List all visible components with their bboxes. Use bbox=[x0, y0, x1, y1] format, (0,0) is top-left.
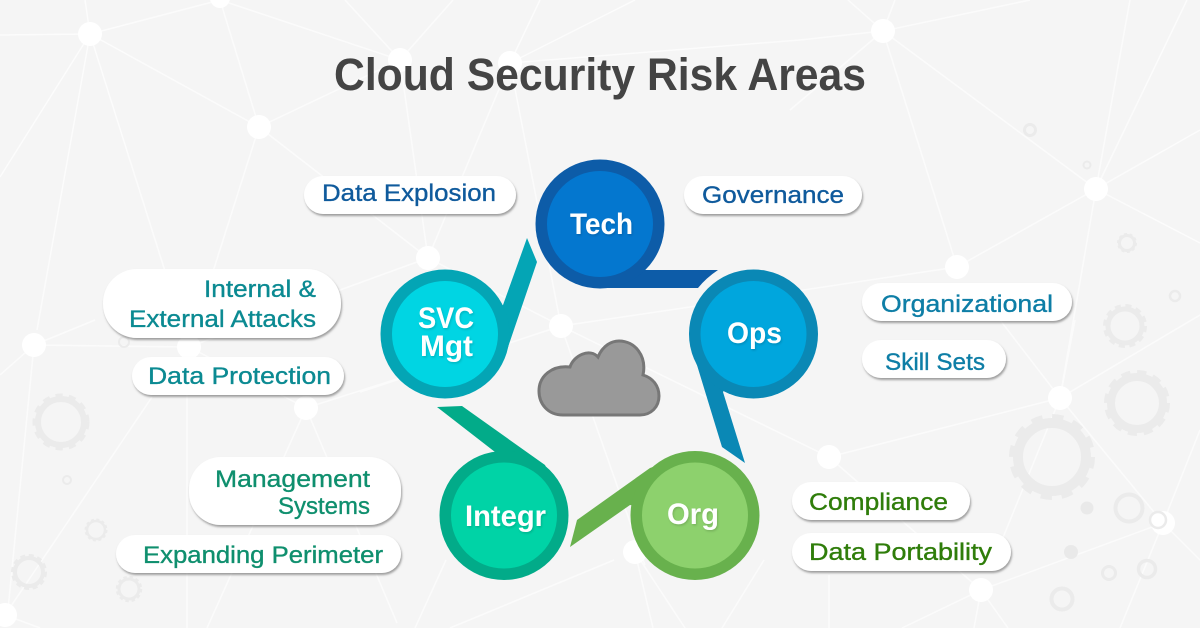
label: Governance: Governance bbox=[702, 182, 844, 209]
label: Organizational bbox=[862, 283, 1072, 321]
label: Data Portability: Data Portability bbox=[809, 539, 992, 566]
icon: cloud bbox=[539, 341, 659, 415]
node: Integr bbox=[437, 406, 568, 580]
label: Data Explosion bbox=[304, 176, 516, 214]
label: Compliance bbox=[792, 482, 970, 520]
label: Data Protection bbox=[132, 357, 344, 395]
node: Ops bbox=[689, 270, 818, 463]
label: Data Explosion: Data Explosion bbox=[322, 180, 496, 207]
label: Internal & External Attacks: External Attacks bbox=[129, 306, 316, 333]
cycle diagram bbox=[380, 160, 818, 580]
label: Compliance: Compliance bbox=[809, 489, 948, 516]
node: Integr: Integr bbox=[465, 500, 546, 533]
label: Internal & External Attacks: Internal & bbox=[204, 276, 316, 303]
decorative gears and rings bbox=[12, 124, 1180, 610]
node: SVC Mgt: Mgt bbox=[420, 330, 473, 363]
label: Skill Sets: Skill Sets bbox=[885, 349, 985, 376]
label: Data Protection: Data Protection bbox=[148, 363, 331, 390]
label: Management Systems: Management bbox=[215, 466, 370, 493]
node: Org bbox=[570, 451, 760, 580]
label: Management Systems bbox=[189, 457, 401, 525]
label: Skill Sets bbox=[862, 340, 1006, 378]
label: Internal & External Attacks bbox=[103, 269, 341, 338]
node: Org: Org bbox=[667, 498, 719, 531]
label: Expanding Perimeter: Expanding Perimeter bbox=[143, 542, 383, 569]
node: Ops: Ops bbox=[727, 317, 782, 350]
label: Data Portability bbox=[792, 533, 1011, 571]
node: SVC Mgt: SVC bbox=[418, 302, 474, 335]
node: Tech: Tech bbox=[570, 208, 633, 241]
label: Organizational: Organizational bbox=[881, 291, 1053, 318]
node: Tech bbox=[536, 160, 718, 288]
title: Cloud Security Risk Areas bbox=[334, 49, 866, 100]
label: Governance bbox=[684, 176, 862, 214]
node: SVC Mgt bbox=[380, 238, 537, 398]
label: Management Systems: Systems bbox=[278, 493, 370, 520]
label: Expanding Perimeter bbox=[116, 535, 401, 573]
